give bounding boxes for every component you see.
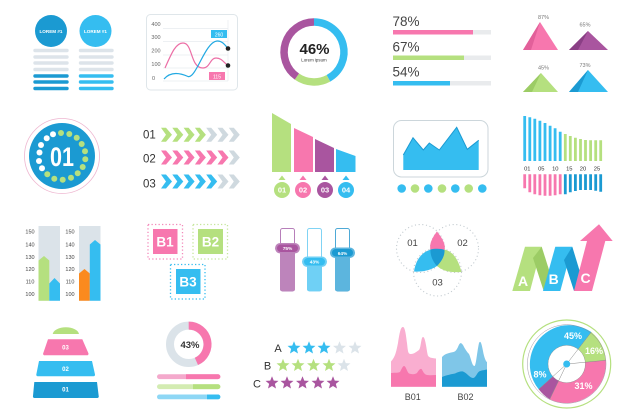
axis labels: 200 <box>151 48 161 54</box>
slider 43%: 43% <box>310 260 320 266</box>
panel: striped bars: 15 <box>566 166 573 172</box>
panel: venn diagram: 01 <box>407 238 418 249</box>
panel: arrow bar charts: 130 <box>25 255 35 261</box>
stacked bars <box>157 374 220 399</box>
panel: triangles <box>523 15 608 92</box>
panel: chevron rows: 01 <box>143 130 156 142</box>
axis labels: 0 <box>152 76 155 82</box>
B3: B3 <box>179 274 197 290</box>
overlap <box>430 249 445 266</box>
panel: striped bars: 05 <box>538 166 545 172</box>
row B stars <box>277 359 350 371</box>
axis labels <box>151 22 161 82</box>
panel: segmented pie: 8% <box>533 370 547 380</box>
panel: pyramid: 01 <box>62 388 69 394</box>
panel: arrow bar charts: 110 <box>66 280 74 286</box>
panel: venn diagram: 03 <box>432 278 443 288</box>
panel: B02 area chart <box>442 342 487 402</box>
panel: triangles: 87% <box>538 15 549 21</box>
axis labels: 400 <box>151 22 161 28</box>
panel: venn diagram: 02 <box>457 238 468 249</box>
dots row <box>397 184 487 193</box>
panel: progress bars <box>392 14 491 86</box>
panel: arrow bar charts: 100 <box>25 292 35 298</box>
panel: segmented pie: 31% <box>574 381 593 391</box>
light blue column: LOREM #1 <box>84 29 107 34</box>
panel: arrow bar charts: 130 <box>65 255 75 261</box>
row 02 <box>161 150 240 164</box>
panel: B boxes <box>148 224 228 299</box>
petal pink <box>430 232 445 250</box>
panel: arrow bar charts <box>25 226 100 301</box>
panel: stepped bars: 03 <box>321 186 329 195</box>
panel: star ratings: A <box>274 343 282 355</box>
panel: striped bars: 10 <box>552 166 559 172</box>
blue line <box>164 41 228 79</box>
pink line <box>165 43 228 68</box>
panel: segmented pie <box>523 320 611 408</box>
panel: chevron rows <box>143 128 240 190</box>
panel: segmented pie: 16% <box>585 346 603 356</box>
panel: segmented pie: 45% <box>564 331 582 341</box>
panel: star ratings: B <box>264 360 271 372</box>
panel: lorem columns <box>35 15 112 88</box>
panel: triangles: 73% <box>579 63 591 69</box>
callout 260: 260 <box>215 32 223 38</box>
panel: donut 46%: 46% <box>299 41 330 58</box>
row C stars <box>266 376 339 388</box>
purple segment 8% <box>539 364 567 399</box>
B2: B2 <box>202 234 219 250</box>
panel: venn diagram <box>396 224 478 296</box>
blue segment 45% <box>530 325 591 389</box>
panel: arrow bar charts: 140 <box>65 242 75 248</box>
callout 115: 115 <box>213 74 221 80</box>
panel: donut 43% <box>157 326 220 399</box>
panel: donut 46%: Lorem ipsum <box>301 58 327 62</box>
panel: triangles: 65% <box>579 22 591 28</box>
B1: B1 <box>156 234 174 250</box>
panel: striped bars: 01 <box>524 166 531 172</box>
panel: stepped bars: 02 <box>299 186 307 195</box>
dark blue column: LOREM #1 <box>40 29 63 34</box>
panel: arrow bar charts: 150 <box>65 230 75 236</box>
panel: chevron rows: 02 <box>143 154 156 166</box>
panel: star ratings: C <box>253 378 261 390</box>
panel: triangles: 45% <box>538 66 549 72</box>
panel: ABC arrow ribbon: B <box>549 271 559 287</box>
axis labels: 300 <box>151 35 161 41</box>
slider 75%: 75% <box>283 246 293 252</box>
panel: arrow bar charts: 110 <box>26 280 34 286</box>
panel: ABC arrow ribbon: C <box>580 270 591 286</box>
panel: stepped bars: 04 <box>342 186 351 195</box>
panel: dotted circle 01 <box>24 118 100 194</box>
petal green <box>437 250 462 272</box>
panel: progress bars: 54% <box>392 64 420 80</box>
panel: ABC arrow ribbon: A <box>518 273 528 289</box>
row 01 <box>161 128 240 142</box>
panel: B01 area chart: B01 <box>405 392 421 402</box>
panel: line chart <box>146 14 238 90</box>
panel: donut 43%: 43% <box>180 340 200 351</box>
panel: stepped bars <box>272 113 356 198</box>
panel: B01 area chart <box>391 327 436 402</box>
panel: B02 area chart: B02 <box>457 392 474 402</box>
panel: pyramid <box>33 327 99 398</box>
panel: arrow bar charts: 100 <box>65 292 75 298</box>
panel: arrow bar charts: 140 <box>25 242 35 248</box>
panel: ABC arrow ribbon <box>512 224 613 291</box>
panel: progress bars: 67% <box>392 40 420 54</box>
panel: arrow bar charts: 120 <box>65 267 75 273</box>
panel: striped bars <box>524 116 601 196</box>
panel: arrow bar charts: 150 <box>25 230 35 236</box>
panel: pyramid: 03 <box>62 346 69 352</box>
panel: dotted circle 01: 01 <box>50 142 74 172</box>
petal blue <box>414 249 443 272</box>
panel: stepped bars: 01 <box>278 186 286 195</box>
axis labels: 100 <box>151 62 161 68</box>
pink segment 31% <box>550 360 606 403</box>
panel: star ratings <box>253 341 361 390</box>
panel: striped bars: 25 <box>594 166 600 172</box>
slider 64%: 64% <box>338 251 348 257</box>
panel: arrow bar charts: 120 <box>25 267 35 273</box>
panel: sliders <box>275 228 355 291</box>
row 03 <box>161 174 240 188</box>
panel: pyramid: 02 <box>62 367 69 373</box>
panel: donut 46% <box>284 22 344 82</box>
row A stars <box>288 341 361 354</box>
panel: area chart box <box>394 120 488 193</box>
panel: striped bars: 20 <box>580 166 586 172</box>
green segment 16% <box>567 332 606 364</box>
panel: chevron rows: 03 <box>143 178 156 190</box>
panel: progress bars: 78% <box>392 14 420 29</box>
